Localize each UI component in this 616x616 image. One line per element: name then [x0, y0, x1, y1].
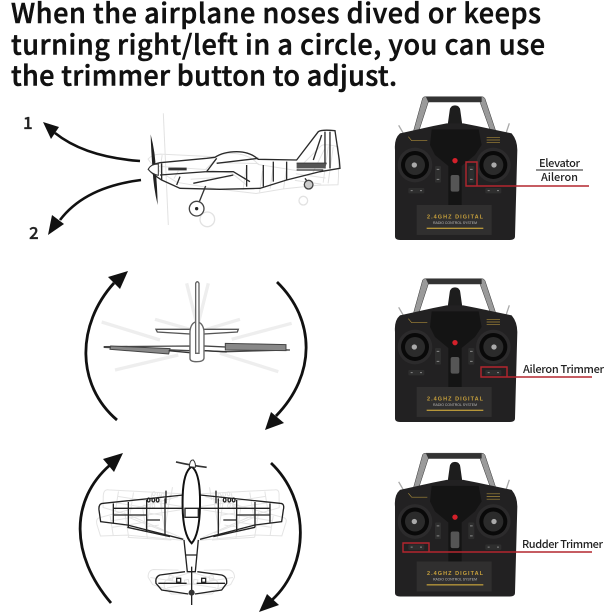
controller 1: [395, 97, 517, 240]
brand text 2: 2.4GHZ DIGITAL: [427, 396, 484, 402]
arrow: rear left: [86, 271, 128, 420]
callout: aileron trimmer: [481, 361, 604, 377]
rear view airplane: [102, 282, 292, 372]
callout: aileron trimmer: Aileron Trimmer: [523, 361, 604, 377]
brand text 2: [427, 396, 484, 407]
arrow 1: [43, 122, 140, 161]
title: turning right/left in a circle, you can use: [11, 24, 545, 62]
brand text 1: [427, 214, 484, 225]
arrow: rear right: [265, 282, 306, 430]
callout: elevator aileron: Elevator: [539, 155, 580, 171]
label 1: 1: [23, 109, 33, 134]
title: [11, 0, 545, 94]
arrow: top view right: [259, 463, 300, 612]
controller 3: [395, 453, 517, 596]
title: the trimmer button to adjust.: [11, 54, 397, 94]
brand text 3: RADIO CONTROL SYSTEM: [433, 578, 477, 582]
brand text 1: RADIO CONTROL SYSTEM: [433, 221, 477, 225]
brand text 3: [427, 571, 484, 582]
arrow 2: [48, 180, 141, 235]
callout: elevator aileron: [466, 155, 589, 186]
side view airplane: [145, 113, 343, 227]
arrow: top view left: [80, 453, 123, 603]
label 2: 2: [29, 219, 39, 244]
callout: elevator aileron: Aileron: [541, 169, 578, 185]
brand text 1: 2.4GHZ DIGITAL: [427, 214, 484, 220]
callout: rudder trimmer: Rudder Trimmer: [522, 536, 604, 552]
top view airplane: [90, 460, 293, 608]
brand text 3: 2.4GHZ DIGITAL: [427, 571, 484, 577]
brand text 2: RADIO CONTROL SYSTEM: [433, 403, 477, 407]
controller 2: [395, 279, 517, 422]
callout: rudder trimmer: [403, 536, 604, 552]
